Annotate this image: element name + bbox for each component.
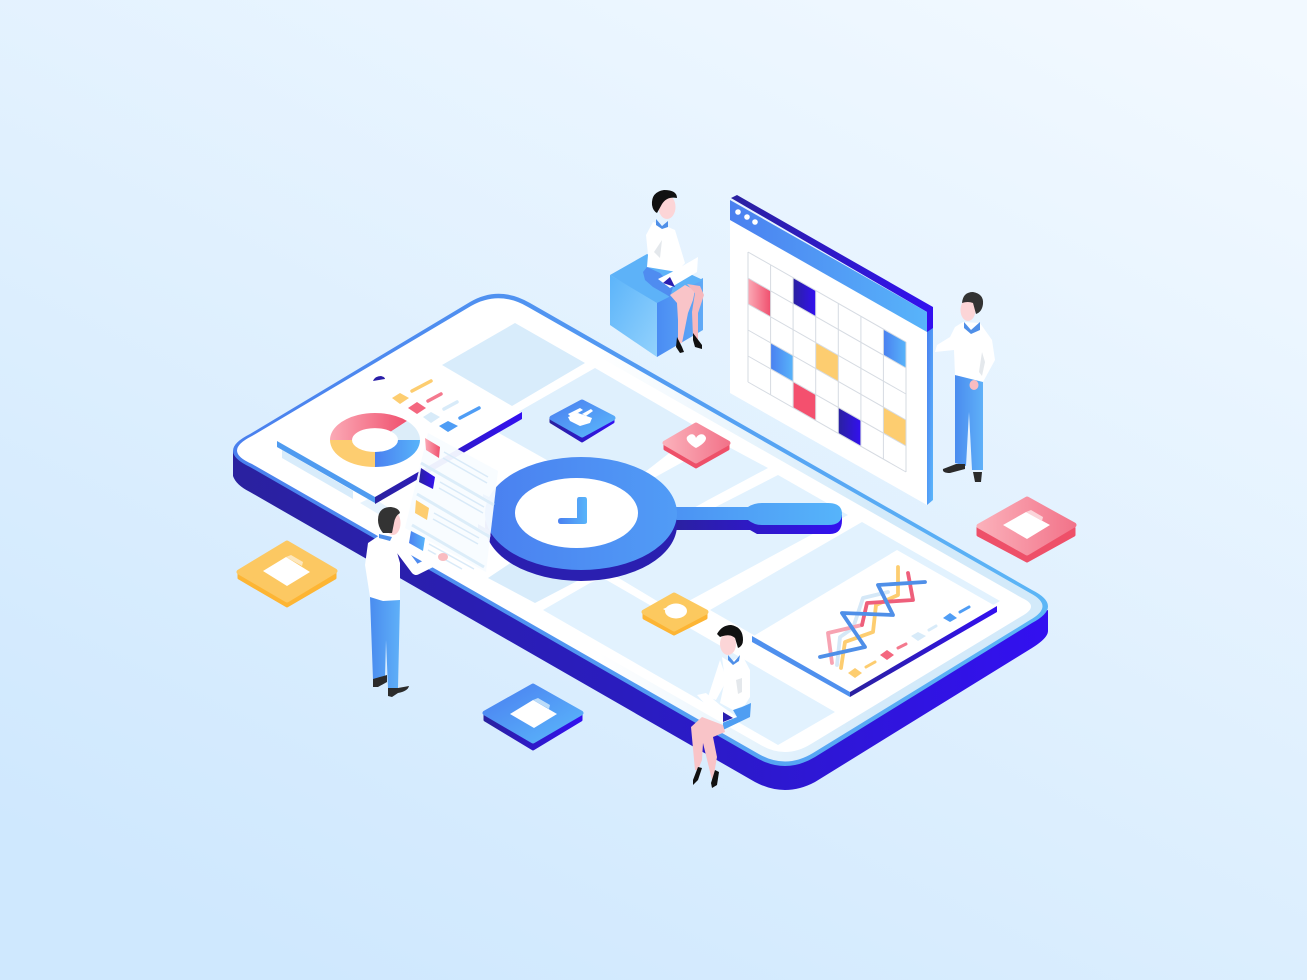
legs [691, 717, 725, 780]
man holding list [365, 507, 448, 697]
chart lines [820, 567, 925, 668]
coloured schedule cells [748, 278, 906, 446]
neck and face [386, 511, 400, 535]
side strip [927, 326, 933, 505]
woman seated on phone edge [691, 625, 751, 788]
shoes [693, 767, 702, 785]
board front [730, 215, 927, 505]
row dividers [412, 463, 494, 567]
shoes [373, 675, 387, 687]
torso [365, 535, 400, 601]
line chart panel [752, 550, 997, 697]
torso and arm [935, 322, 995, 382]
blue tabs behind sheet [483, 494, 495, 503]
hair [652, 190, 677, 213]
window dots [735, 209, 758, 225]
panel navy edge [375, 412, 522, 504]
icon: thumbs-up tile [551, 402, 613, 441]
grid lines [748, 252, 906, 472]
magnifier with clock [485, 457, 842, 581]
navy top edge [731, 195, 933, 332]
icon: red folder tile [978, 499, 1074, 561]
phone side wall [233, 451, 1048, 790]
text lines [428, 452, 488, 569]
trousers [370, 597, 400, 688]
shirt shade [654, 240, 662, 258]
row colour squares [425, 438, 440, 458]
lens top [485, 457, 677, 570]
head [960, 299, 976, 321]
hair [717, 625, 743, 648]
panel surface [277, 365, 522, 498]
header bar [730, 200, 927, 332]
icon: yellow folder tile [239, 543, 335, 606]
arm [708, 660, 727, 700]
phone bezel [237, 298, 1042, 762]
shoes [676, 337, 684, 353]
collar [379, 534, 392, 541]
collar [728, 655, 740, 665]
list sheet [405, 433, 498, 572]
skirt [643, 267, 673, 297]
icon: chat tile [644, 595, 706, 634]
trousers [955, 375, 983, 470]
handle side [670, 515, 842, 534]
skirt [723, 703, 751, 730]
laptop [697, 693, 737, 723]
icon: heart tile [665, 425, 728, 467]
donut chart [330, 413, 420, 467]
handle top [670, 503, 842, 525]
clock hands [558, 497, 587, 524]
folder glyph [510, 700, 557, 728]
donut legend [373, 376, 479, 432]
folder glyph [1003, 512, 1050, 539]
face [658, 195, 676, 219]
phone device [233, 294, 1048, 790]
man beside calendar [935, 292, 995, 482]
sheet [405, 433, 498, 572]
torso [720, 655, 750, 710]
panel blue edge [277, 441, 375, 503]
woman seated on cube [610, 190, 704, 357]
phone screen [249, 307, 1031, 752]
clock face [515, 478, 638, 548]
chart legend [848, 607, 969, 678]
collar [964, 322, 980, 334]
hair [962, 292, 983, 314]
shoes [943, 464, 965, 473]
legs [670, 285, 695, 343]
hair [378, 507, 400, 533]
shirt shade [736, 678, 742, 694]
phone rim [233, 294, 1048, 766]
calendar board [730, 195, 933, 505]
laptop [658, 257, 698, 288]
folder glyph [263, 557, 310, 586]
shirt shade [979, 352, 985, 376]
donut chart panel [277, 365, 522, 504]
cube [610, 254, 703, 357]
torso [646, 222, 685, 272]
arm [395, 542, 440, 570]
hand [970, 380, 978, 390]
hand [438, 553, 448, 561]
panel navy edge [850, 606, 997, 697]
face [720, 633, 736, 655]
icon: blue folder tile [485, 686, 581, 749]
panel blue edge [752, 636, 850, 697]
screen layout cells [282, 323, 1000, 745]
collar [656, 219, 668, 229]
panel surface [752, 550, 997, 693]
lens side [485, 469, 677, 581]
